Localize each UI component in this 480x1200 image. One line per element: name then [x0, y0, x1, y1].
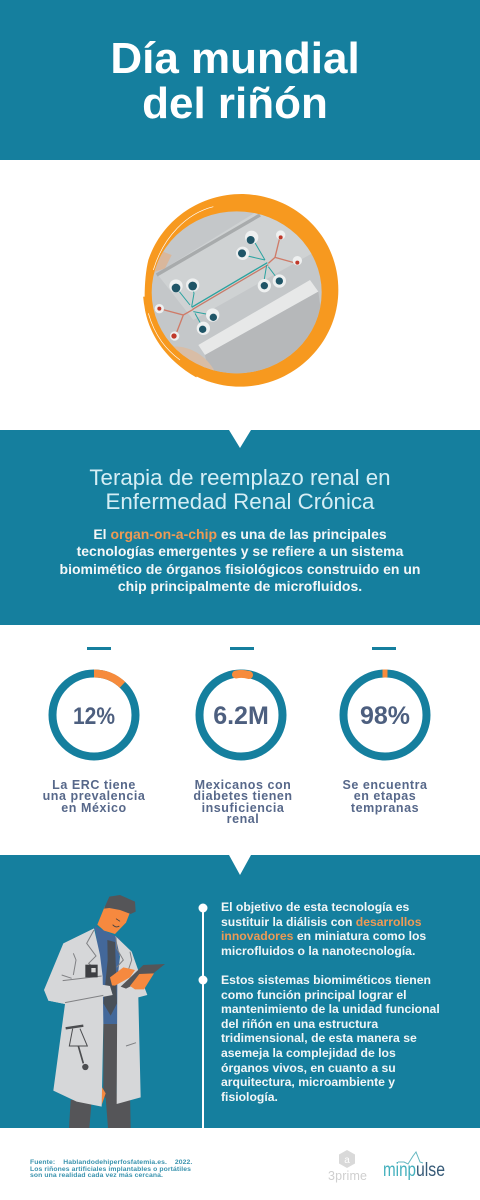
logo: 3prime: 3prime	[328, 1169, 367, 1183]
label: en etapas	[354, 789, 416, 803]
upper hand	[110, 967, 135, 986]
intro heading: Enfermedad Renal Crónica	[106, 489, 374, 514]
title	[110, 34, 360, 128]
objective text	[221, 900, 426, 958]
logo: mindpulse: minp	[383, 1160, 416, 1181]
label: renal	[227, 812, 259, 826]
intro heading	[89, 465, 391, 514]
label: una prevalencia	[43, 789, 145, 803]
label: tempranas	[351, 801, 419, 815]
stat 12%	[43, 647, 145, 815]
logo: mindpulse	[383, 1151, 445, 1181]
panel: objective	[0, 855, 480, 1128]
source note: son una realidad cada vez más cercana.	[30, 1172, 163, 1179]
biomimetic text: mantenimiento de la unidad funcional	[221, 1002, 440, 1016]
ring	[196, 670, 286, 760]
stethoscope	[66, 1026, 88, 1070]
intro text: El organ-on-a-chip es una de las principales	[93, 526, 387, 542]
chip photo	[152, 211, 322, 374]
stat 98%	[340, 647, 430, 815]
notch arrow	[229, 430, 251, 448]
label	[193, 778, 293, 826]
label: La ERC tiene	[52, 778, 136, 792]
ring	[340, 670, 430, 760]
objective text: El objetivo de esta tecnología es	[221, 900, 409, 914]
label: Mexicanos con	[195, 778, 291, 792]
biomimetic text: Estos sistemas biomiméticos tienen	[221, 973, 431, 987]
coat left panel	[44, 928, 103, 1107]
intro text: chip principalmente de microfluidos.	[118, 578, 362, 594]
biomimetic text: tridimensional, de esta manera se	[221, 1031, 417, 1045]
coat creases	[62, 930, 136, 1046]
tablet	[121, 964, 165, 989]
notch arrow	[229, 855, 251, 875]
label	[342, 778, 428, 815]
biomimetic text: fisiología.	[221, 1090, 278, 1104]
biomimetic text	[221, 973, 440, 1104]
dash	[87, 647, 111, 650]
biomimetic text: asemeja la complejidad de los	[221, 1046, 396, 1060]
neck and face	[97, 904, 131, 934]
objective text: sustituir la diálisis con desarrollos	[221, 915, 422, 929]
logo: 3prime: a	[344, 1155, 350, 1166]
header band	[0, 0, 480, 160]
timeline	[198, 904, 208, 1128]
intro text: tecnologías emergentes y se refiere a un sistema	[77, 543, 403, 559]
stat 6.2M	[193, 647, 293, 826]
biomimetic text: arquitectura, microambiente y	[221, 1075, 395, 1089]
biomimetic text: como función principal lograr el	[221, 988, 407, 1002]
coat right panel	[115, 936, 147, 1104]
dash	[230, 647, 254, 650]
hair	[104, 895, 136, 914]
label: Se encuentra	[342, 778, 428, 792]
legs	[69, 1022, 131, 1128]
lower hand	[130, 973, 154, 989]
tie	[103, 940, 117, 1016]
ring: 6.2M	[213, 702, 269, 730]
biomimetic text: órganos vivos, en cuanto a su	[221, 1061, 396, 1075]
panel: intro	[0, 430, 480, 625]
ring: 98%	[359, 702, 410, 730]
objective text: innovadores en miniatura como los	[221, 929, 426, 943]
logo: mindpulse: ulse	[416, 1160, 445, 1181]
logo: 3prime	[328, 1150, 367, 1183]
shirt	[95, 926, 120, 1024]
ring: 12%	[73, 703, 115, 730]
orange lining	[102, 1087, 106, 1105]
objective text: microfluidos o la nanotecnología.	[221, 944, 415, 958]
photo: organ-on-a-chip in orange brush circle	[143, 194, 338, 387]
intro text	[60, 526, 420, 594]
orange brush ring	[144, 194, 338, 387]
intro heading: Terapia de reemplazo renal en	[89, 465, 391, 490]
face details	[113, 919, 120, 927]
label: insuficiencia	[202, 801, 284, 815]
illustration: doctor with tablet	[44, 895, 165, 1128]
label: en México	[61, 801, 127, 815]
label	[43, 778, 145, 815]
title: Día mundial	[110, 34, 360, 83]
forearm	[48, 980, 113, 1004]
dash	[372, 647, 396, 650]
ring	[48, 670, 140, 760]
badge	[85, 965, 98, 977]
label: diabetes tienen	[193, 789, 293, 803]
title: del riñón	[142, 79, 328, 128]
source note	[30, 1159, 192, 1179]
source note: Fuente: Hablandodehiperfosfatemia.es. 2022.	[30, 1159, 192, 1166]
source note: Los riñones artificiales implantables o portátiles	[30, 1166, 191, 1172]
biomimetic text: del riñón en una estructura	[221, 1017, 378, 1031]
intro text: biomimético de órganos fisiológicos construido en un	[60, 561, 420, 577]
